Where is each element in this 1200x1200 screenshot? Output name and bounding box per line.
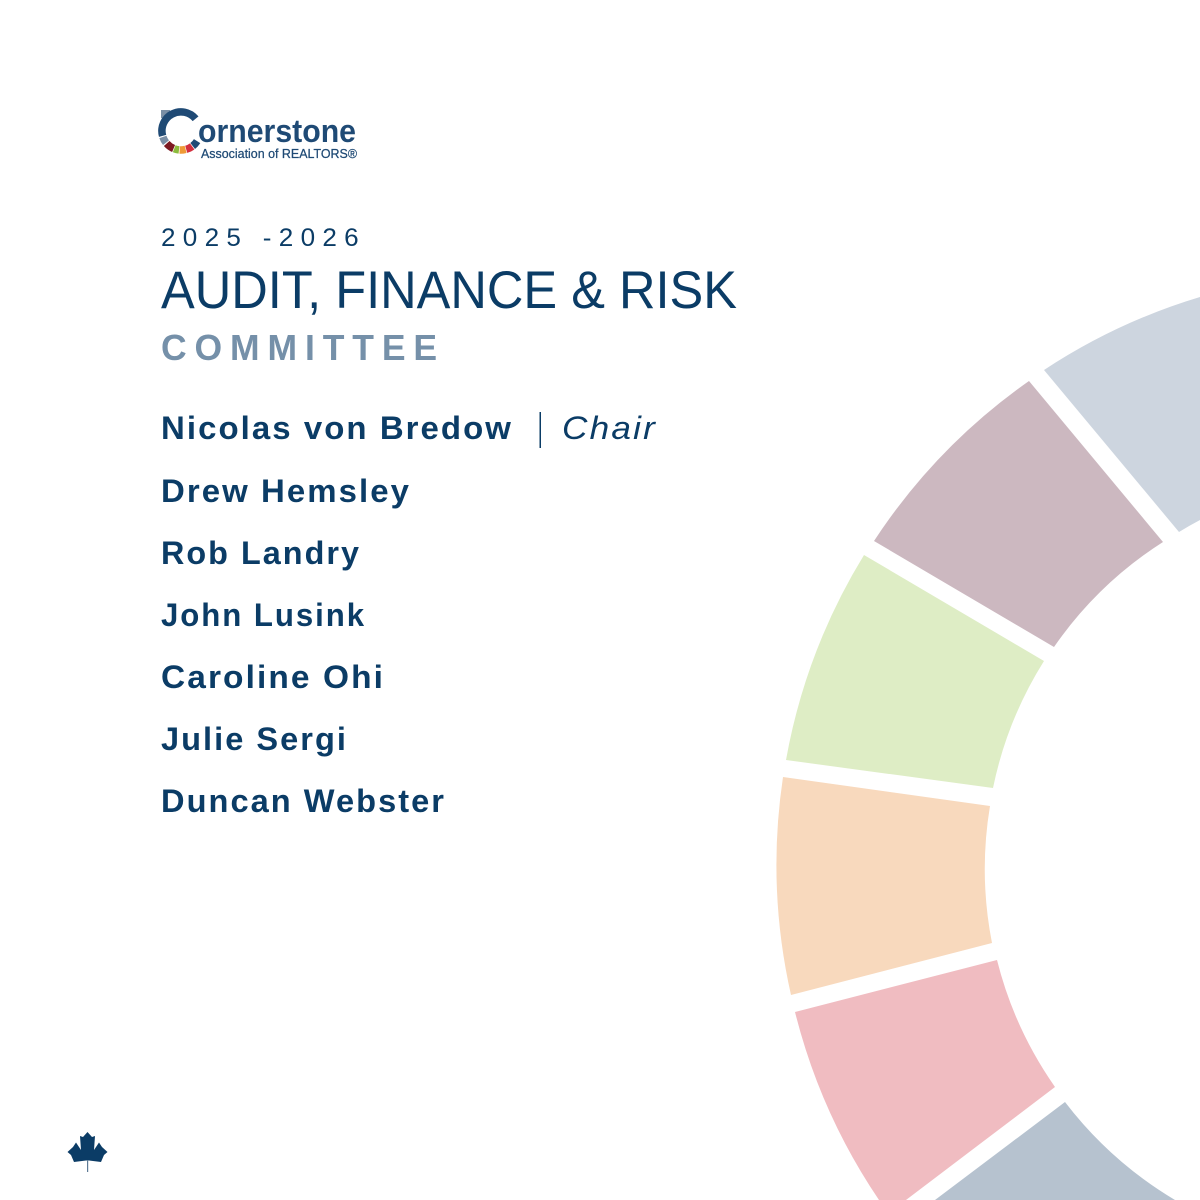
segment: pink — [795, 960, 1055, 1200]
logo: Cornerstone Association of REALTORS — [161, 110, 357, 161]
icon: maple leaf — [68, 1132, 108, 1172]
segment: green — [786, 555, 1044, 788]
segment: mauve — [874, 381, 1163, 647]
chair role: Chair — [562, 410, 657, 446]
chair separator — [540, 412, 541, 448]
segment: slate — [935, 1102, 1175, 1200]
logo wordmark: ornerstone — [198, 113, 356, 149]
decorative ring segments — [776, 297, 1200, 1200]
member: Duncan Webster — [161, 783, 446, 819]
segment: light blue — [1044, 297, 1200, 532]
logo corner square — [161, 110, 170, 118]
member: John Lusink — [161, 597, 366, 633]
member: Julie Sergi — [161, 721, 348, 757]
member: Caroline Ohi — [161, 659, 385, 695]
title: AUDIT, FINANCE & RISK — [161, 261, 737, 320]
segment: orange — [776, 777, 992, 995]
member list — [161, 410, 657, 819]
member: Rob Landry — [161, 535, 361, 571]
subtitle: COMMITTEE — [161, 327, 445, 368]
member: Drew Hemsley — [161, 473, 411, 509]
date range: 2025 -2026 — [161, 224, 366, 252]
logo tagline: Association of REALTORS® — [201, 146, 357, 161]
logo ring — [162, 112, 197, 150]
chair name: Nicolas von Bredow — [161, 410, 513, 446]
